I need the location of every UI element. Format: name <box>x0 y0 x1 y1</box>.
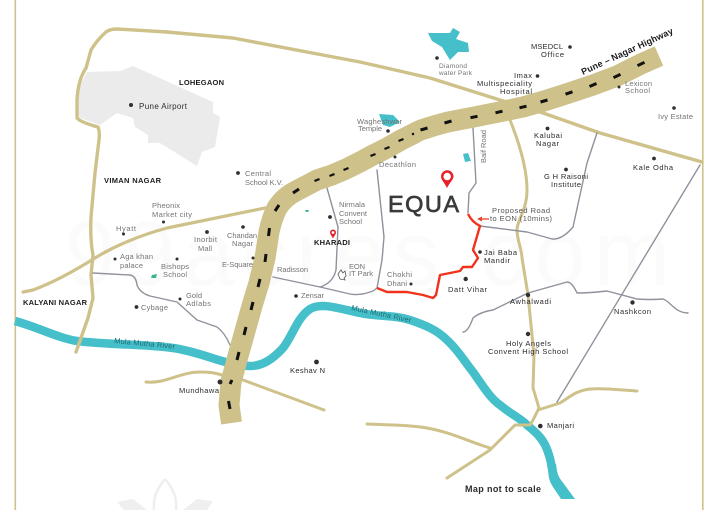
label: river west: Mula Mutha River <box>114 336 176 351</box>
label: Wagheshwar Temple: Temple <box>358 124 382 133</box>
label: Wagheshwar Temple: Wagheshwar <box>357 117 402 126</box>
Mula Mutha River <box>15 306 552 466</box>
label: EON IT Park <box>349 262 373 278</box>
label: Mundhawa: Mundhawa <box>179 386 220 395</box>
label: Aga khan palace: palace <box>120 261 143 270</box>
label: Kalubai Nagar <box>534 127 562 148</box>
label: Mundhawa <box>179 380 222 395</box>
label: EON IT Park: IT Park <box>349 269 373 278</box>
road: Manjari east <box>538 389 637 410</box>
river mouth <box>547 464 575 499</box>
airport area <box>77 66 220 166</box>
label: E-Square: E-Square <box>222 260 253 269</box>
grey roads <box>93 128 700 402</box>
label: Nirmala Convent School <box>328 200 368 226</box>
label: Chandan Nagar: Nagar <box>232 239 254 248</box>
label: Lexicon School <box>618 79 652 95</box>
label: Kale Odha: Kale Odha <box>633 163 674 172</box>
lake: Wagheshwar <box>379 114 400 127</box>
road: highway to Manjari <box>447 120 539 478</box>
label: Ivy Estate <box>658 106 693 121</box>
label: Bishops School <box>161 258 189 279</box>
label: Keshav N: Keshav N <box>290 366 325 375</box>
label: Holy Angels Convent High School: Convent High School <box>488 347 568 356</box>
green patches <box>151 210 309 278</box>
Pune Nagar Highway band <box>229 56 659 423</box>
label: G H Raisoni Institute: Institute <box>551 180 581 189</box>
label: proposed road <box>490 206 552 223</box>
label: Jai Baba Mandir: Mandir <box>484 256 510 265</box>
arrow: proposed road <box>477 216 489 222</box>
label: Central School: Central <box>245 169 271 178</box>
label: Zensar: Zensar <box>301 291 324 300</box>
highway dashes <box>228 62 644 409</box>
label: Nirmala Convent School: Nirmala <box>339 200 366 209</box>
note: map not to scale: Map not to scale <box>465 484 541 494</box>
label: Jai Baba Mandir <box>478 248 518 265</box>
label: Imax Multispeciality Hospital: Multispeciality <box>477 79 532 88</box>
label: Holy Angels Convent High School: Holy Angels <box>506 339 551 348</box>
label: river east: Mula Mutha River <box>351 303 413 325</box>
label: Chokhi Dhani: Chokhi <box>387 270 412 279</box>
road: Mundhawa <box>146 372 324 410</box>
label: Radisson: Radisson <box>277 265 308 274</box>
label: Aga khan palace: Aga khan <box>120 252 153 261</box>
label: Kale Odha <box>633 157 674 172</box>
label: Nirmala Convent School: School <box>339 217 362 226</box>
label: Pune Airport: Pune Airport <box>139 102 188 111</box>
label: Gold Adlabs: Gold <box>186 291 202 300</box>
label: MSEDCL Office: MSEDCL <box>531 42 563 51</box>
label: Nirmala Convent School: Convent <box>339 209 368 218</box>
label: Nashkcon: Nashkcon <box>614 307 651 316</box>
label: Kalubai Nagar: Nagar <box>536 139 560 148</box>
label: Lexicon School: Lexicon <box>625 79 652 88</box>
outer ring road <box>76 29 702 352</box>
label: Imax Multispeciality Hospital: Hospital <box>500 87 532 96</box>
label: Diamond water Park <box>435 56 473 77</box>
label: Diamond water Park: Diamond <box>439 63 467 70</box>
lake: Diamond water park <box>428 28 469 60</box>
label: proposed road: Proposed Road <box>492 206 550 215</box>
lake: small pond <box>463 153 471 162</box>
label: Gold Adlabs <box>178 291 211 308</box>
area labels <box>23 78 350 307</box>
icon: faint lotus logo <box>117 479 213 510</box>
label: Cybage: Cybage <box>141 303 168 312</box>
label: Chokhi Dhani <box>387 270 412 288</box>
label: Datt Vihar <box>448 277 488 294</box>
label: Hyatt: Hyatt <box>116 224 137 233</box>
label: Chokhi Dhani: Dhani <box>387 279 407 288</box>
label: Ivy Estate: Ivy Estate <box>658 112 693 121</box>
label: MSEDCL Office: Office <box>541 50 564 59</box>
label: Jai Baba Mandir: Jai Baba <box>484 248 518 257</box>
label: Decathlon: Decathlon <box>379 160 416 169</box>
area labels: LOHEGAON <box>179 78 224 87</box>
label: Keshav N <box>290 360 325 375</box>
icon: EQUA location pin <box>441 170 454 188</box>
icon: EON IT Park <box>338 270 346 280</box>
label: Pheonix Market city <box>152 201 192 224</box>
label: proposed road: to EON (10mins) <box>490 214 552 223</box>
label: Awhalwadi: Awhalwadi <box>510 297 551 306</box>
label: Chandan Nagar <box>227 225 257 248</box>
label: Imax Multispeciality Hospital <box>477 71 539 96</box>
label: EON IT Park: EON <box>349 262 365 271</box>
label: Manjari: Manjari <box>547 421 574 430</box>
road: Viman Nagar to Kalyani Nagar <box>23 208 265 292</box>
label: Imax Multispeciality Hospital: Imax <box>514 71 532 80</box>
label: Inorbit Mall: Mall <box>198 244 212 253</box>
location map: 99acres.com <box>65 203 670 305</box>
label: G H Raisoni Institute <box>544 168 588 189</box>
label: Wagheshwar Temple <box>357 117 402 133</box>
label: Baif Road: Baif Road <box>479 130 488 163</box>
label: Aga khan palace <box>114 252 153 270</box>
label: Awhalwadi <box>510 293 551 306</box>
label: Bishops School: Bishops <box>161 262 189 271</box>
label: Kalubai Nagar: Kalubai <box>534 131 562 140</box>
proposed road to EON <box>377 214 480 298</box>
label: Bishops School: School <box>163 270 187 279</box>
label: Nashkcon <box>614 300 651 316</box>
label: Inorbit Mall <box>194 230 218 253</box>
label: highway name: Pune – Nagar Highway <box>580 26 675 77</box>
label: Datt Vihar: Datt Vihar <box>448 285 488 294</box>
label: Decathlon <box>379 156 416 169</box>
label: E-Square <box>222 256 254 269</box>
label: Pheonix Market city: Pheonix <box>152 201 180 210</box>
label: G H Raisoni Institute: G H Raisoni <box>544 172 588 181</box>
label: Central School <box>236 169 283 187</box>
label: Diamond water Park: water Park <box>438 70 473 77</box>
road: Manjari west <box>367 424 490 448</box>
area labels: VIMAN NAGAR <box>104 176 162 185</box>
area labels: KALYANI NAGAR <box>23 298 88 307</box>
label: Lexicon School: School <box>625 86 650 95</box>
project logo: EQUA: EQUA <box>388 191 459 217</box>
label: MSEDCL Office <box>531 42 572 59</box>
label: Gold Adlabs: Adlabs <box>186 299 211 308</box>
label: Central School: School K.V. <box>245 178 283 187</box>
icon: Kharadi pin <box>330 230 336 238</box>
label: Pheonix Market city: Market city <box>152 210 192 219</box>
area labels: KHARADI <box>314 238 350 247</box>
label: Holy Angels Convent High School <box>488 332 568 356</box>
label: Chandan Nagar: Chandan <box>227 231 257 240</box>
label: Inorbit Mall: Inorbit <box>194 235 218 244</box>
